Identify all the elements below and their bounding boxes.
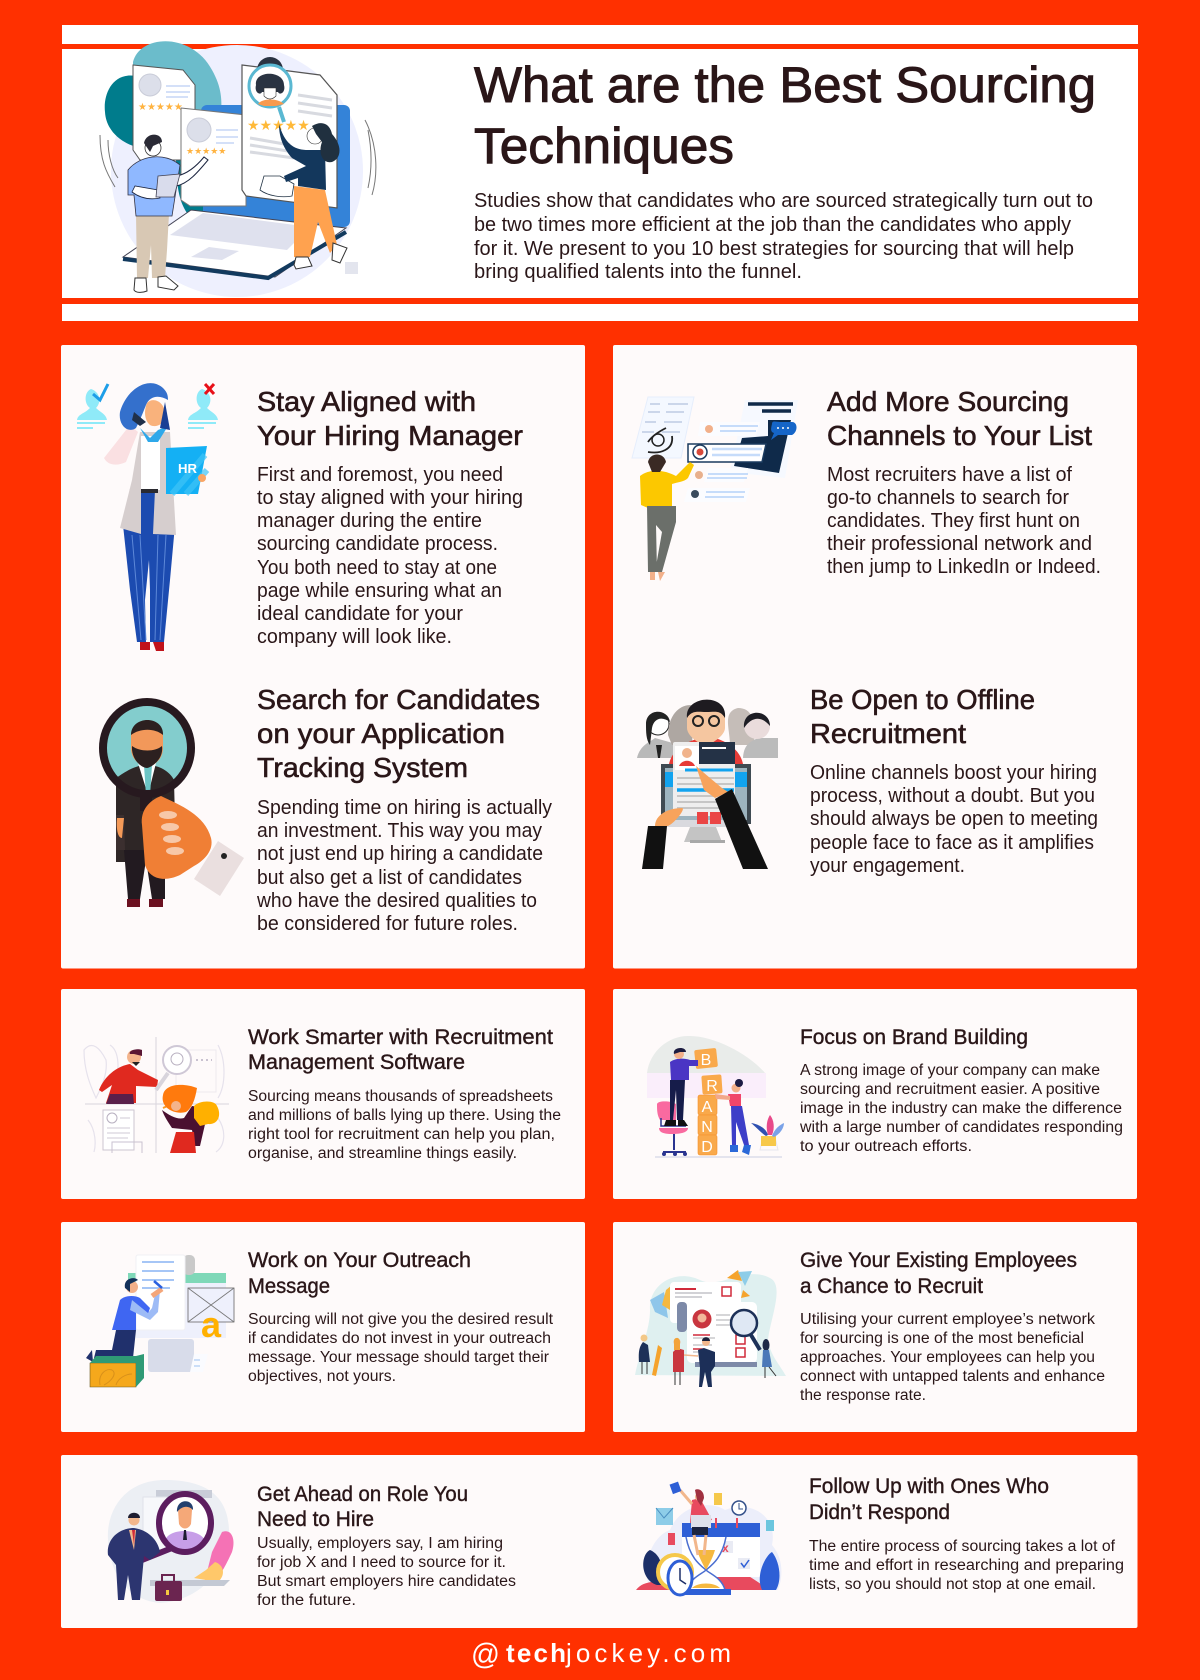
heading: offline recruitment [810,684,1035,749]
heading: get ahead: Get Ahead on Role You [257,1483,468,1506]
illustration: people stacking BRAND blocks: R [706,1078,718,1095]
text block: recruitment software [248,1088,561,1162]
panel: recruitment software [61,989,585,1199]
illustration: hourglass, calendar and clocks: x [722,1541,729,1555]
text block: introduction: for it. We present to you 10 best strategies for sourcing that will help [474,238,1074,260]
illustration: recruiters reviewing candidate profiles on a laptop: ★★★★★ [186,147,226,157]
heading: search ATS: Tracking System [257,752,468,783]
text block: offline recruitment: Online channels boost your hiring [810,762,1097,784]
text block: more channels: go-to channels to search for [827,487,1069,509]
heading: outreach message: Work on Your Outreach [248,1249,471,1272]
footer: techjockey brand [471,1638,731,1671]
heading: more channels: Add More Sourcing [827,386,1069,417]
panel: outreach message [61,1222,585,1432]
text block: employee referrals: Utilising your current employee’s network [800,1311,1095,1328]
illustration: man seen through a magnifying glass [103,702,244,907]
text block: stay aligned: manager during the entire [257,510,482,532]
text block: offline recruitment: your engagement. [810,855,965,877]
illustration: man with magnifier over candidate [108,1480,234,1603]
heading: stay aligned [257,386,523,451]
text block: search ATS: but also get a list of candidates [257,867,522,889]
illustration: two people using recruitment software [84,1037,229,1153]
text block: more channels: their professional network and [827,533,1092,555]
text block: recruitment software: and millions of balls lying up there. Using the [248,1107,561,1124]
text block: follow up: time and effort in researching and preparing [809,1557,1124,1574]
heading: follow up: Didn’t Respond [809,1501,950,1524]
text block: introduction: Studies show that candidates who are sourced strategically turn out to [474,190,1093,212]
panel: employee referrals [613,1222,1137,1432]
heading: brand building: Focus on Brand Building [800,1026,1028,1049]
text block: brand building: sourcing and recruitment easier. A positive [800,1081,1100,1098]
heading: search ATS [257,684,540,783]
heading: outreach message: Message [248,1275,330,1298]
panel: brand building [613,989,1137,1199]
text block: introduction: be two times more efficient at the job than the candidates who apply [474,214,1071,236]
text block: stay aligned: to stay aligned with your hiring [257,487,523,509]
text block: more channels: candidates. They first hunt on [827,510,1080,532]
heading: offline recruitment: Recruitment [810,718,966,749]
heading: more channels: Channels to Your List [827,420,1092,451]
illustration: person arranging sourcing channel cards [632,397,798,581]
text block: more channels: Most recruiters have a list of [827,464,1072,486]
text block: get ahead: for the future. [257,1592,356,1609]
text block: get ahead [257,1535,516,1609]
heading: search ATS: Search for Candidates [257,684,540,715]
text block: brand building: with a large number of candidates responding [799,1119,1123,1136]
heading: get ahead [257,1483,468,1531]
heading: search ATS: on your Application [257,718,505,749]
text block: search ATS [256,797,552,935]
text block: employee referrals: connect with untapped talents and enhance [800,1368,1105,1385]
text block: introduction [474,190,1093,283]
text block: search ATS: who have the desired qualities to [256,890,537,912]
text block: employee referrals: for sourcing is one of the most beneficial [800,1330,1084,1347]
heading: recruitment software: Management Software [248,1051,465,1074]
heading: employee referrals: a Chance to Recruit [800,1275,983,1298]
text block: offline recruitment: should always be open to meeting [810,808,1098,830]
illustration: woman on phone holding HR clipboard [77,383,218,651]
text block: follow up [809,1538,1124,1593]
heading: stay aligned: Stay Aligned with [257,386,476,417]
illustration: man writing an outreach message: a [201,1304,222,1345]
heading: outreach message [248,1249,471,1298]
panel: channels and offline tips [613,345,1137,968]
text block: search ATS: not just end up hiring a candidate [257,843,543,865]
text block: recruitment software: Sourcing means thousands of spreadsheets [248,1088,553,1105]
illustration: people stacking BRAND blocks [647,1036,784,1157]
illustration: man writing an outreach message [86,1255,234,1387]
illustration: people stacking BRAND blocks: D [701,1139,713,1156]
illustration: people stacking BRAND blocks: N [701,1119,713,1136]
text block: brand building [799,1062,1123,1155]
text block: search ATS: be considered for future roles. [257,913,518,935]
heading: more channels [827,386,1092,451]
text block: employee referrals [800,1311,1105,1404]
panel: alignment and ATS tips [61,345,585,968]
text block: get ahead: for job X and I need to source for it. [257,1554,506,1571]
text block: follow up: The entire process of sourcing takes a lot of [809,1538,1116,1555]
footer: techjockey brand: tech [506,1638,566,1668]
text block: stay aligned: First and foremost, you need [257,464,503,486]
illustration: employees with resumes and magnifier [635,1270,786,1387]
text block: employee referrals: approaches. Your employees can help you [800,1349,1095,1366]
text block: brand building: to your outreach efforts. [800,1138,972,1155]
text block: get ahead: Usually, employers say, I am hiring [257,1535,503,1552]
text block: recruitment software: right tool for recruitment can help you plan, [248,1126,555,1143]
text block: search ATS: an investment. This way you may [257,820,542,842]
heading: follow up: Follow Up with Ones Who [809,1475,1049,1498]
text block: more channels [827,464,1101,578]
text block: search ATS: Spending time on hiring is actually [257,797,552,819]
footer: techjockey brand: @ [471,1638,500,1671]
text block: introduction: bring qualified talents into the funnel. [474,261,802,283]
text block: recruitment software: organise, and streamline things easily. [248,1145,517,1162]
illustration: woman on phone holding HR clipboard: HR [178,461,198,476]
text block: stay aligned [257,464,523,648]
heading: main title: Techniques [474,118,734,174]
heading: get ahead: Need to Hire [257,1508,374,1531]
illustration: hands pointing at candidate profile on tablet [637,700,778,869]
text block: outreach message: Sourcing will not give you the desired result [248,1311,554,1328]
text block: outreach message: message. Your message should target their [248,1349,549,1366]
heading: employee referrals [800,1249,1077,1298]
heading: recruitment software: Work Smarter with Recruitment [248,1026,553,1049]
text block: get ahead: But smart employers hire candidates [257,1573,516,1590]
illustration: people stacking BRAND blocks: A [702,1099,713,1116]
illustration: recruiters reviewing candidate profiles on a laptop: ★★★★★ [247,118,310,134]
text block: stay aligned: You both need to stay at one [257,557,497,579]
text block: outreach message: objectives, not yours. [248,1368,396,1385]
text block: stay aligned: ideal candidate for your [257,603,463,625]
text block: stay aligned: sourcing candidate process. [257,533,498,555]
illustration: people stacking BRAND blocks: B [701,1052,711,1069]
text block: stay aligned: page while ensuring what an [257,580,502,602]
heading: employee referrals: Give Your Existing Employees [800,1249,1077,1272]
heading: main title: What are the Best Sourcing [474,57,1096,113]
heading: follow up [809,1475,1049,1524]
heading: main title [474,57,1096,174]
text block: brand building: A strong image of your company can make [800,1062,1100,1079]
text block: offline recruitment: process, without a doubt. But you [810,785,1095,807]
panel: get ahead and follow up [61,1455,1138,1628]
heading: stay aligned: Your Hiring Manager [257,420,523,451]
panel: header [62,25,1138,321]
text block: follow up: lists, so you should not stop at one email. [809,1576,1096,1593]
text block: stay aligned: company will look like. [257,626,452,648]
footer: techjockey brand: jockey.com [565,1638,731,1668]
text block: employee referrals: the response rate. [800,1387,926,1404]
text block: outreach message [248,1311,554,1385]
heading: recruitment software [248,1026,553,1074]
text block: more channels: then jump to LinkedIn or Indeed. [827,556,1101,578]
illustration: hourglass, calendar and clocks [636,1482,781,1595]
text block: offline recruitment: people face to face as it amplifies [810,832,1094,854]
heading: offline recruitment: Be Open to Offline [810,684,1035,715]
text block: offline recruitment [810,762,1098,877]
illustration: recruiters reviewing candidate profiles on a laptop: ★★★★★ [138,102,183,113]
text block: outreach message: if candidates do not invest in your outreach [248,1330,551,1347]
text block: brand building: image in the industry can make the difference [800,1100,1122,1117]
illustration: recruiters reviewing candidate profiles on a laptop [100,41,376,297]
